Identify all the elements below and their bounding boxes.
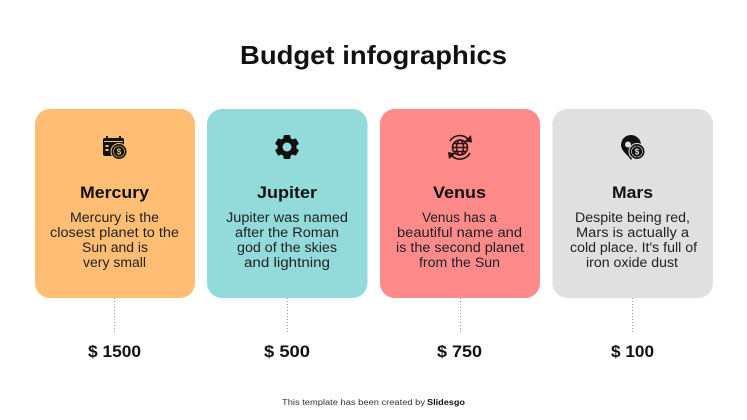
text: Mercury description: Mercury is the [70, 210, 159, 225]
icon: calendar with dollar coin [103, 136, 127, 160]
heading: Jupiter: Jupiter [257, 183, 317, 202]
amount: Jupiter: $ 500 [264, 342, 310, 361]
text: Jupiter description [226, 210, 348, 270]
amount: Mercury: $ 1500 [88, 342, 141, 361]
icon: globe with currency arrows [448, 135, 472, 159]
panel: Mars [552, 109, 713, 298]
text: Jupiter description: and lightning [244, 255, 330, 270]
text: Venus description: Venus has a [422, 210, 497, 225]
text: Mars description: cold place. It's full of [570, 240, 697, 255]
amount: Venus: $ 750 [437, 342, 482, 361]
text: Jupiter description: Jupiter was named [226, 210, 348, 225]
icon: map pin with dollar coin: $ [635, 148, 640, 156]
text: Venus description [396, 210, 524, 270]
text: Jupiter description: god of the skies [237, 240, 337, 255]
text: Mars description: Despite being red, [575, 210, 690, 225]
text: Mercury description: closest planet to the [50, 225, 179, 240]
panel: Jupiter [207, 109, 368, 298]
footer credit: Slidesgo [427, 398, 465, 407]
footer credit [282, 398, 465, 407]
text: Mars description [570, 210, 697, 270]
text: Venus description: beautiful name and [397, 225, 522, 240]
text: Mercury description [50, 210, 179, 270]
heading: Mercury: Mercury [80, 183, 150, 202]
text: Mars description: Mars is actually a [576, 225, 690, 240]
text: Jupiter description: after the Roman [235, 225, 339, 240]
panel: Venus [380, 109, 540, 298]
heading: Mars: Mars [612, 183, 653, 202]
heading: Venus: Venus [433, 183, 486, 202]
text: Mercury description: very small [83, 255, 146, 270]
text: Venus description: is the second planet [396, 240, 524, 255]
title: Budget infographics [240, 40, 507, 70]
text: Venus description: from the Sun [419, 255, 500, 270]
amount: Mars: $ 100 [611, 342, 654, 361]
text: Mercury description: Sun and is [82, 240, 148, 255]
text: Mars description: iron oxide dust [586, 255, 678, 270]
icon: gear [275, 135, 299, 159]
footer credit: This template has been created by [282, 398, 425, 407]
icon: map pin with dollar coin [621, 135, 645, 160]
panel: Mercury [35, 109, 195, 298]
icon: calendar with dollar coin: $ [117, 148, 122, 156]
